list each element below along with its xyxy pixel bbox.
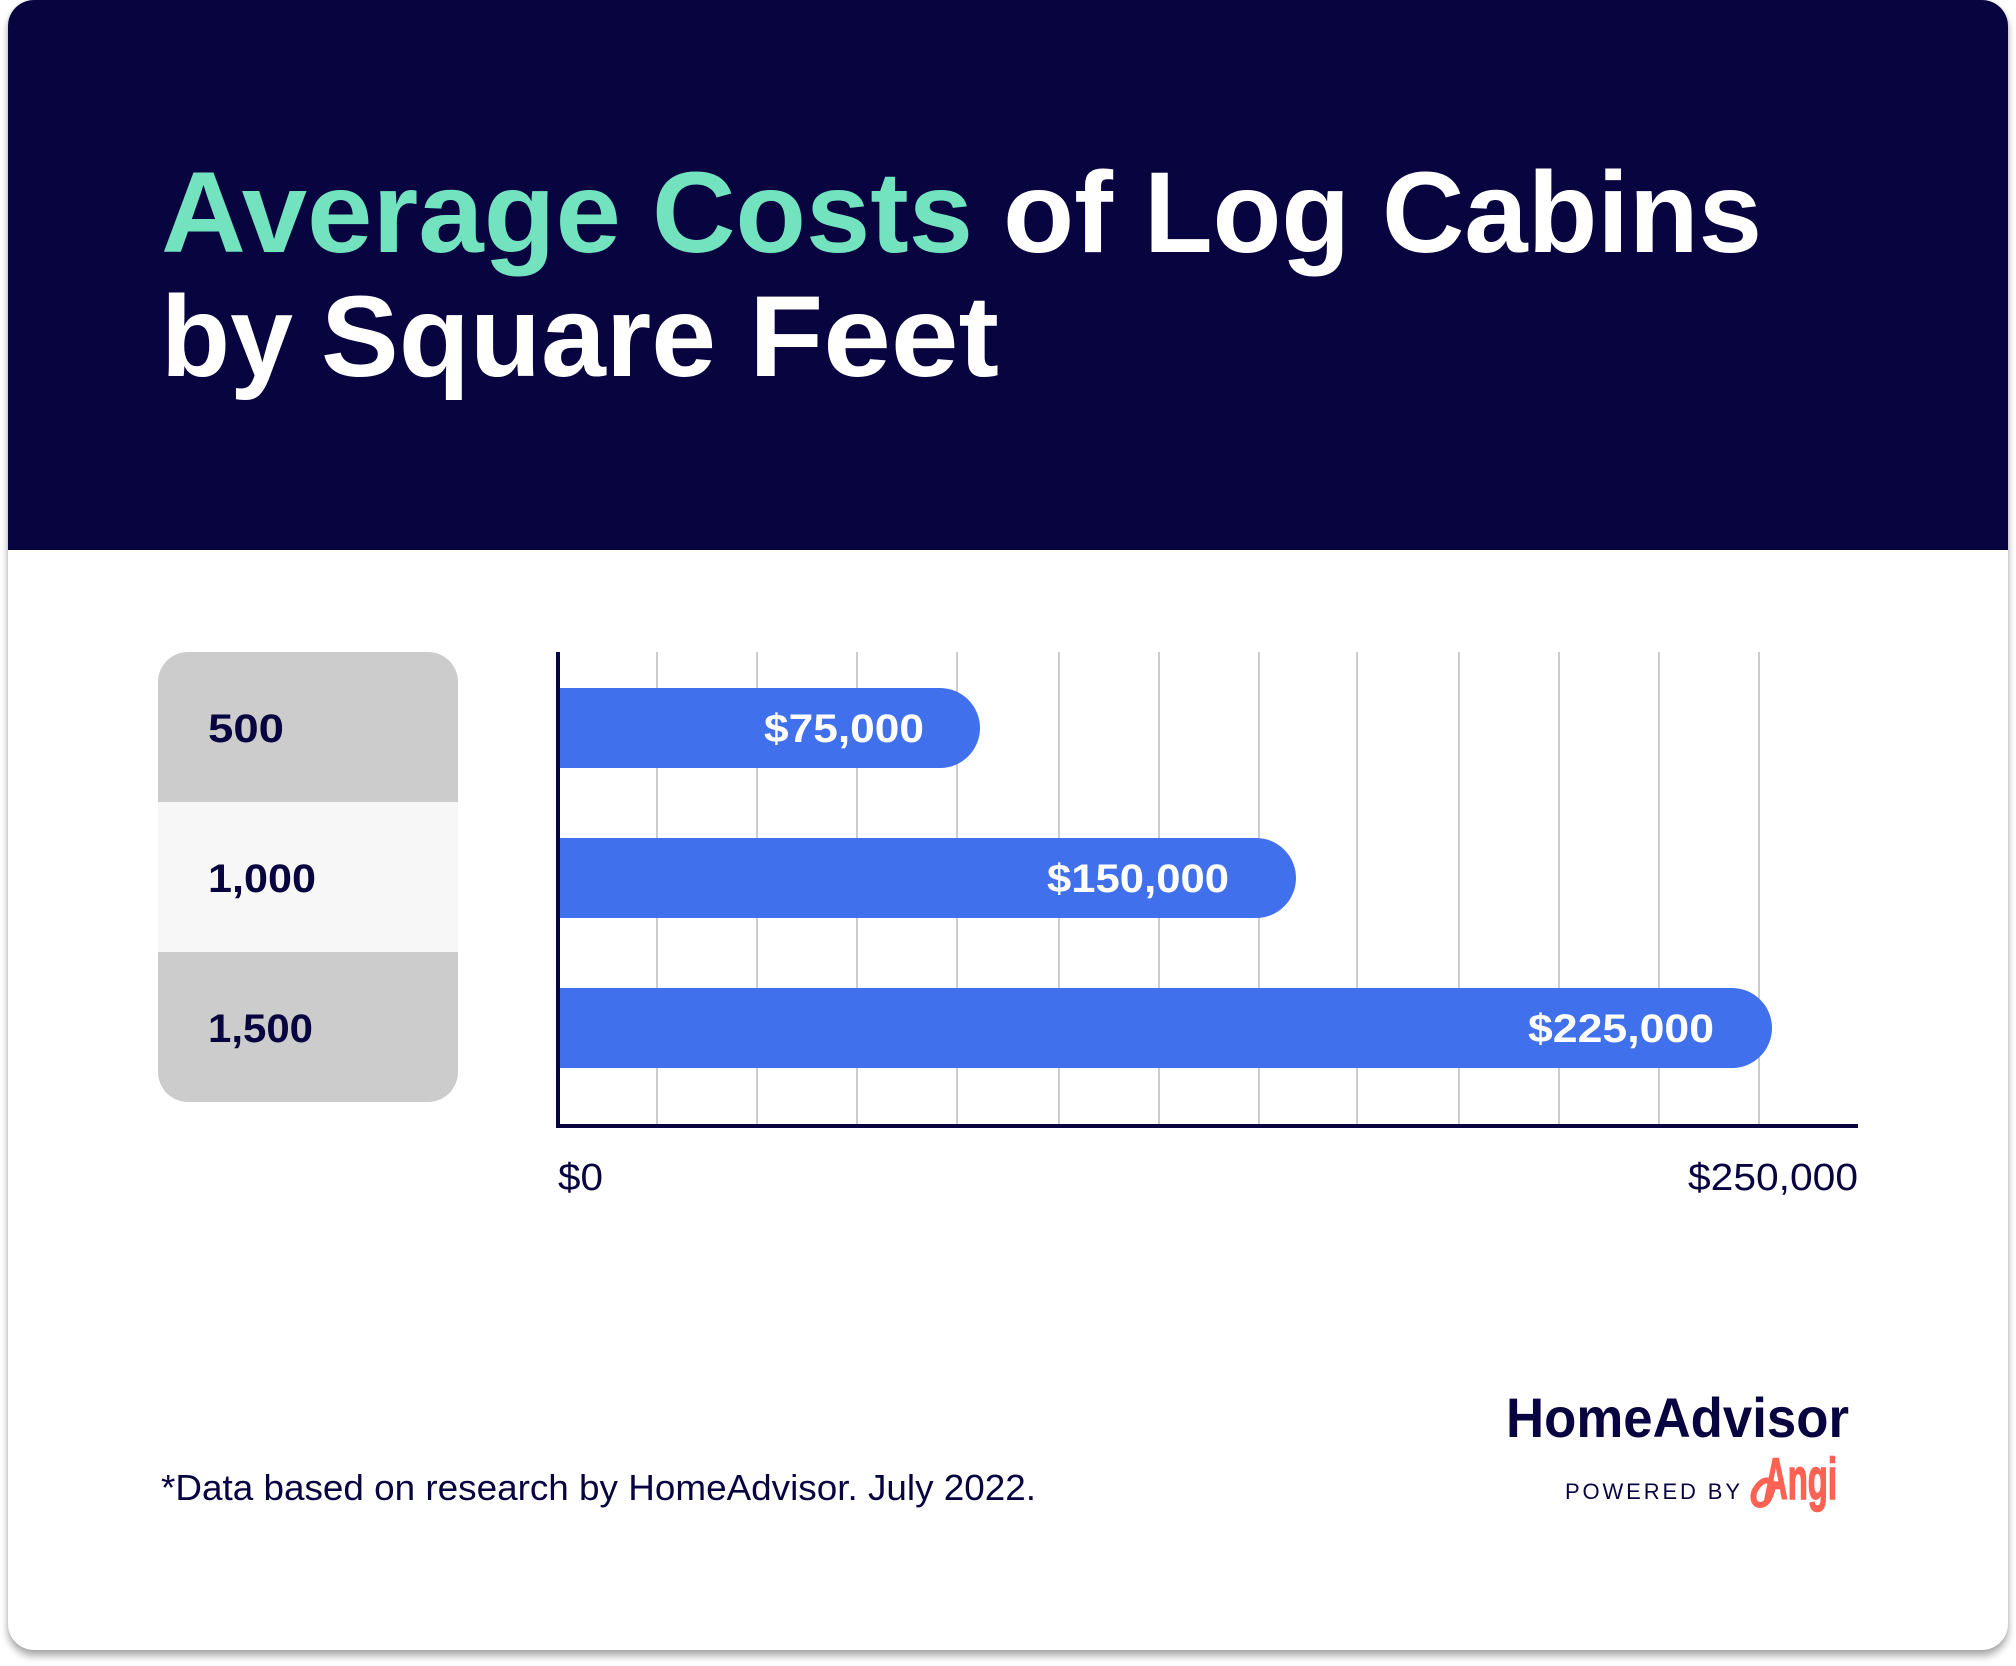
title: Costs <box>652 149 973 277</box>
title: of <box>1003 149 1114 277</box>
icon: Angi wordmark: Angi <box>1764 1447 1837 1512</box>
icon: Angi wordmark <box>1753 1447 1837 1512</box>
title <box>161 149 1762 401</box>
title: Average <box>161 149 621 277</box>
title: Log <box>1144 149 1350 277</box>
row labels: 500 <box>208 707 284 751</box>
title: Square <box>321 273 716 401</box>
footnote: *Data based on research by HomeAdvisor. July 2022. <box>161 1467 1036 1508</box>
axis label: minimum: $0 <box>558 1157 603 1199</box>
bar: 500 sq ft: $75,000 <box>764 707 924 751</box>
bar chart <box>556 652 1858 1199</box>
logo wordmark: HomeAdvisor <box>1506 1386 1849 1449</box>
bar: 500 sq ft <box>560 688 980 768</box>
bar: 1,000 sq ft <box>560 838 1296 918</box>
bar: 1,500 sq ft: $225,000 <box>1528 1007 1714 1051</box>
logo: HomeAdvisor powered by Angi <box>1506 1386 1849 1512</box>
axis label: maximum: $250,000 <box>1688 1157 1858 1199</box>
title: Cabins <box>1382 149 1762 277</box>
axes <box>556 652 1858 1128</box>
panel: square feet table <box>158 652 458 1102</box>
row labels <box>208 707 316 1051</box>
bar: 1,500 sq ft <box>560 988 1772 1068</box>
panel: header <box>8 0 2008 550</box>
row labels: 1,500 <box>208 1007 313 1051</box>
title: by <box>161 273 293 401</box>
title: Feet <box>749 273 999 401</box>
powered by text: POWERED BY <box>1565 1479 1740 1504</box>
row labels: 1,000 <box>208 857 316 901</box>
bar: 1,000 sq ft: $150,000 <box>1047 857 1229 901</box>
